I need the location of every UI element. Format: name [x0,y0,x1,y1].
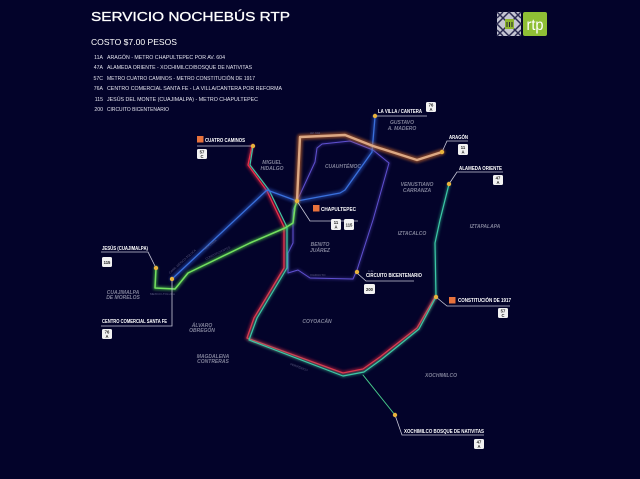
district labels: CONTRERAS [197,359,229,365]
stop: Xochimilco Bosque de Nativitas: XOCHIMILCO BOSQUE DE NATIVITAS [404,429,485,435]
district labels: COYOACÁN [302,318,332,325]
district labels: VENUSTIANO [401,182,434,188]
district labels: A. MADERO [387,126,416,132]
district labels: XOCHIMILCO [424,373,457,379]
route 76A: blue [172,117,375,279]
stop: Centro Comercial Santa Fe: A [105,334,109,339]
stop: Constitución de 1917: C [501,313,505,318]
route list: 11A [94,55,104,61]
district labels: IZTACALCO [398,231,426,237]
route 47A: teal-green [249,146,449,415]
district labels: MAGDALENA [197,354,230,360]
street micro labels: VIADUCTO [310,273,326,277]
route 57C: red [247,146,435,373]
route list: JESÚS DEL MONTE (CUAJIMALPA) - METRO CHAPULTEPEC [107,96,258,103]
stop: Circuito Bicentenario [364,273,422,294]
route 115: lime green [155,201,297,289]
stop: Constitución de 1917: 57 [501,308,506,314]
route list: CIRCUITO BICENTENARIO [107,107,169,113]
stop: Chapultepec: 115 [346,222,353,228]
stop: Cuatro Caminos [197,136,246,159]
icon: RTP logo [523,12,547,36]
icon: CDMX logo [497,12,521,36]
district labels: CUAJIMALPA [107,290,140,296]
route list: CENTRO COMERCIAL SANTA FE - LA VILLA/CANTERA POR REFORMA [107,86,283,92]
street micro labels: PERIFÉRICO [290,361,309,372]
district labels: OBREGÓN [189,327,215,334]
stop: Cuatro Caminos: CUATRO CAMINOS [205,138,246,144]
route 11A: brown-orange [297,135,442,201]
stop: Centro Comercial Santa Fe: 76 [105,330,110,334]
street micro labels: MEXICO-TOLUCA [150,292,175,296]
stop: Chapultepec: 11 [334,220,339,225]
stop: Cuatro Caminos: C [200,154,204,159]
title: SERVICIO NOCHEBÚS RTP [91,9,290,24]
street micro labels: AV. 604 [310,131,321,135]
stop: Circuito Bicentenario: CIRCUITO BICENTENARIO [366,273,422,279]
stop: Chapultepec: CHAPULTEPEC [321,207,356,213]
district labels: DE MORELOS [106,295,140,301]
route list: 115 [95,97,103,103]
district labels: GUSTAVO [390,120,414,126]
district labels: MIGUEL [262,160,282,166]
stop: La Villa / Cantera [378,102,436,115]
subtitle: cost: COSTO $7.00 PESOS [91,37,177,47]
route list: ARAGÓN - METRO CHAPULTEPEC POR AV. 604 [107,54,225,61]
street micro labels: CARR. MÉXICO-TOLUCA [167,248,197,275]
stop: Aragón [449,133,468,155]
route list: 76A [94,86,104,92]
route 200: purple circuit [288,141,389,279]
stop: Jesús (Cuajimalpa): 115 [104,260,111,265]
stop: Alameda Oriente: A [496,180,500,185]
stop: Jesús (Cuajimalpa): JESÚS (CUAJIMALPA) [102,245,148,252]
stop: La Villa / Cantera: 76 [429,102,434,108]
street micro labels [150,131,374,372]
stop: Aragón: ARAGÓN [449,133,468,141]
street micro labels: CONSTITUYENTES [205,245,231,261]
stop: Jesús (Cuajimalpa) [102,245,148,267]
district labels: CARRANZA [403,188,432,194]
stop: Xochimilco Bosque de Nativitas: A [477,444,481,449]
stop: Chapultepec [313,205,356,230]
stop: Constitución de 1917: CONSTITUCIÓN DE 1917 [458,296,511,304]
district labels: IZTAPALAPA [470,224,501,230]
route list: 200 [94,107,103,113]
icon: RTP logo: rtp [526,17,544,34]
stop: Alameda Oriente: ALAMEDA ORIENTE [459,166,503,172]
stop: La Villa / Cantera: LA VILLA / CANTERA [378,109,422,115]
stop: Alameda Oriente [459,166,503,185]
street micro labels: EJE [368,269,374,273]
stop: Aragón: A [461,150,465,154]
district labels [106,120,501,379]
stop: Centro Comercial Santa Fe: CENTRO COMERCIAL SANTA FE [102,319,168,325]
stop: Aragón: 11 [461,145,466,150]
route list: ALAMEDA ORIENTE - XOCHIMILCO/BOSQUE DE NATIVITAS [107,65,253,71]
stop: La Villa / Cantera: A [429,107,433,112]
leader lines [101,116,510,435]
route list: 47A [94,65,104,71]
stop: Constitución de 1917 [449,296,511,318]
district labels: HIDALGO [260,166,284,172]
stop dots [154,114,451,417]
district labels: ÁLVARO [191,322,212,329]
stop: Cuatro Caminos: 57 [200,150,205,154]
route list: METRO CUATRO CAMINOS - METRO CONSTITUCIÓN DE 1917 [107,75,255,82]
stop: Xochimilco Bosque de Nativitas [404,429,485,449]
stop: Alameda Oriente: 47 [496,176,501,180]
route list [93,54,283,113]
district labels: JUÁREZ [310,247,331,254]
stop: Centro Comercial Santa Fe [102,319,168,339]
district labels: BENITO [311,242,330,248]
district labels: CUAUHTÉMOC [325,162,361,170]
stop: Circuito Bicentenario: 200 [366,287,374,292]
route list: 57C [93,76,103,82]
street micro labels: REFORMA [203,238,217,251]
stop: Xochimilco Bosque de Nativitas: 47 [477,440,482,444]
stop: Chapultepec: A [334,224,338,230]
